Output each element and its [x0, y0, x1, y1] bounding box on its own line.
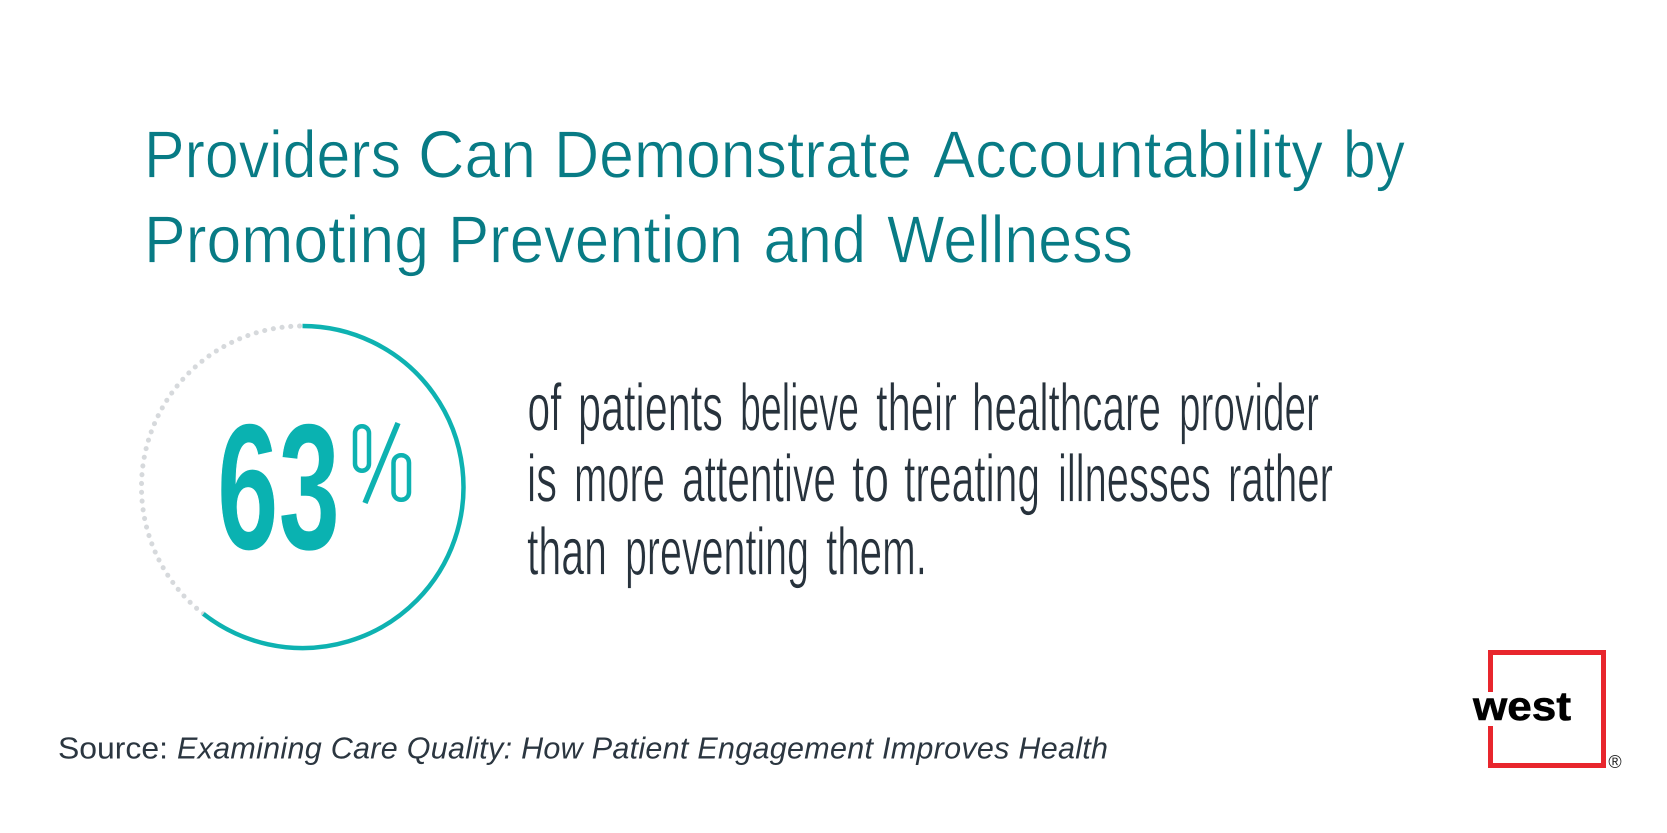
percent sign: [355, 423, 409, 503]
title: Can: [418, 118, 536, 192]
registered mark: ®: [1608, 752, 1622, 772]
source line: Source:: [58, 732, 168, 766]
statistic description: treating: [904, 442, 1040, 516]
title: and: [764, 202, 866, 278]
logo square: [1490, 652, 1604, 766]
title: Prevention: [448, 202, 743, 278]
statistic description: believe: [740, 370, 859, 446]
statistic description: their: [876, 370, 957, 446]
title: Accountability: [933, 118, 1323, 192]
statistic description: healthcare: [972, 370, 1161, 446]
source line: Examining Care Quality: How Patient Engagement Improves Health: [177, 732, 1108, 766]
title: Demonstrate: [554, 118, 912, 192]
statistic description: than: [527, 514, 607, 590]
statistic description: [527, 370, 1333, 590]
title: [144, 118, 1405, 278]
donut chart: 63 percent: [141, 326, 463, 648]
statistic description: of: [528, 370, 562, 446]
statistic description: to: [852, 442, 889, 516]
statistic description: provider: [1179, 370, 1319, 446]
title: by: [1343, 118, 1405, 192]
value 63: 63: [217, 387, 340, 588]
title: Wellness: [887, 202, 1133, 278]
statistic description: illnesses: [1058, 442, 1211, 516]
statistic description: patients: [578, 370, 723, 446]
dotted remainder of ring: [141, 326, 302, 614]
statistic description: preventing: [625, 514, 809, 590]
title: Providers: [144, 118, 401, 192]
logo wordmark: west: [1472, 683, 1571, 729]
statistic description: attentive: [682, 442, 836, 516]
statistic description: more: [574, 442, 665, 516]
statistic description: them.: [826, 514, 927, 590]
solid ring arc: [203, 326, 463, 648]
statistic description: rather: [1228, 442, 1333, 516]
statistic description: is: [527, 442, 557, 516]
west logo: [1472, 652, 1622, 772]
title: Promoting: [144, 202, 429, 278]
